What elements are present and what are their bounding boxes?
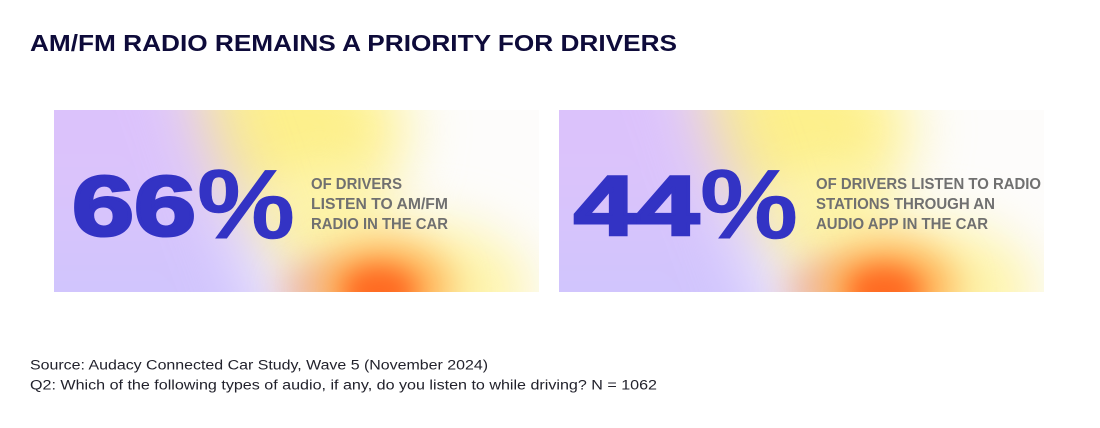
description: 44%: STATIONS THROUGH AN: [816, 196, 995, 213]
source note: Q2: Which of the following types of audio, if any, do you listen to while driving? N = 1062: [30, 378, 657, 394]
description: 44%: AUDIO APP IN THE CAR: [816, 216, 988, 233]
description: 66%: RADIO IN THE CAR: [311, 216, 448, 233]
statistic: 44%: [574, 149, 798, 259]
description: 66%: [311, 176, 448, 233]
description: 66%: LISTEN TO AM/FM: [311, 196, 448, 213]
statistic: 66%: [72, 149, 295, 259]
source note: Source: Audacy Connected Car Study, Wave 5 (November 2024): [30, 358, 488, 374]
description: 66%: OF DRIVERS: [311, 176, 402, 193]
statistic: 44%: 44: [574, 159, 699, 253]
statistic: 66%: 66: [72, 159, 196, 253]
title: AM/FM RADIO REMAINS A PRIORITY FOR DRIVERS: [30, 30, 677, 56]
statistic: 66%: %: [197, 149, 295, 259]
source note: [30, 358, 657, 394]
description: 44%: [816, 176, 1041, 233]
statistic: 44%: %: [700, 149, 798, 259]
panel: 44% of drivers: [559, 110, 1044, 292]
panel: 66% of drivers: [54, 110, 539, 292]
